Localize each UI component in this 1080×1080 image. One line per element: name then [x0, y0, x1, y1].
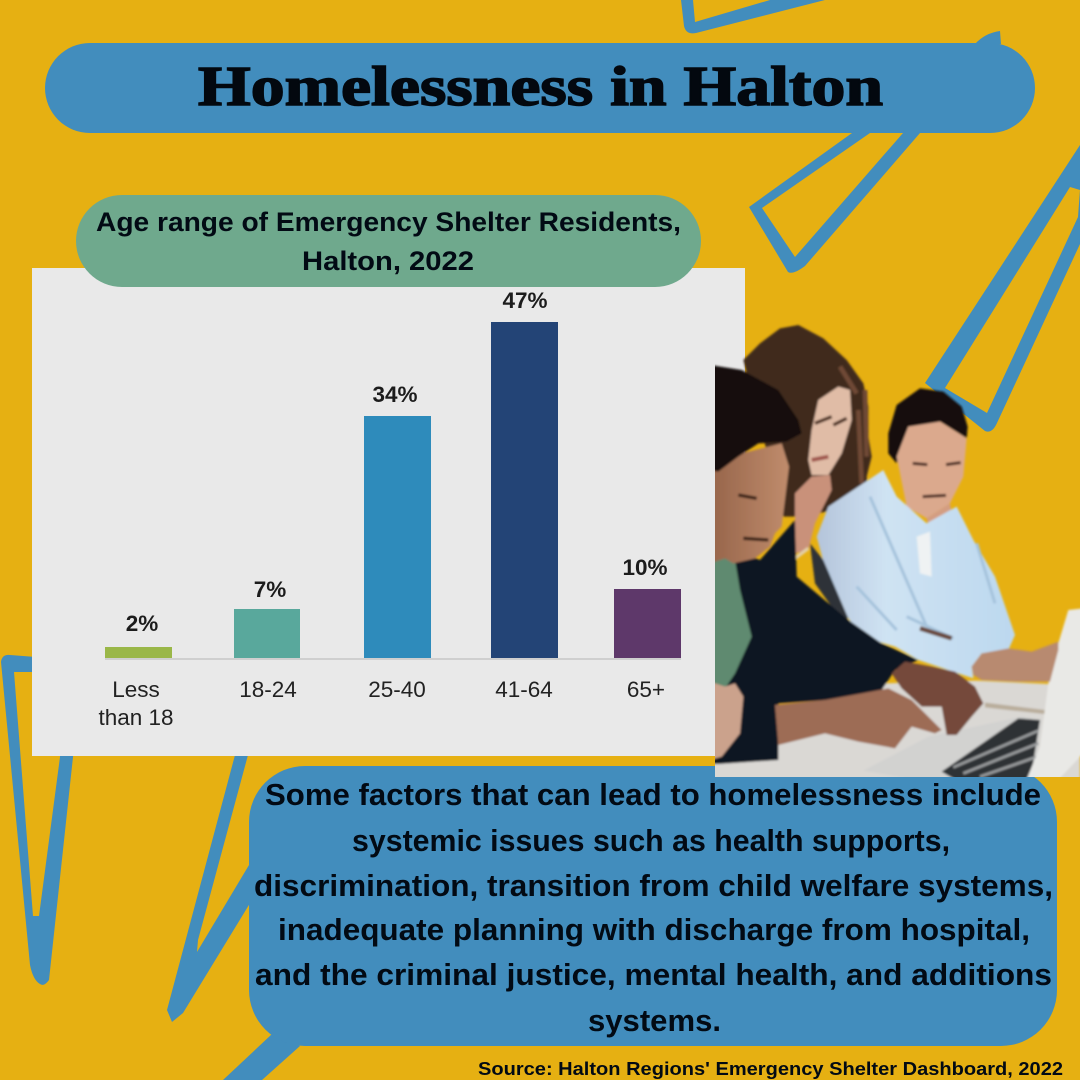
title pill — [45, 43, 1035, 133]
factors text block: systems. — [588, 1003, 721, 1038]
top triangle outline — [681, 0, 825, 33]
title: Homelessness in Halton — [198, 56, 883, 118]
bar: 65+: 65+ — [627, 677, 665, 702]
heading pill — [76, 195, 701, 287]
bar: 18-24: 18-24 — [239, 677, 297, 702]
bar: 41-64 — [491, 288, 558, 702]
bar: 65+: 10% — [622, 555, 668, 580]
bar: 18-24: 7% — [254, 577, 286, 602]
woman in the middle — [743, 325, 872, 558]
left triangle outline — [1, 655, 75, 985]
woman on the right — [810, 388, 1058, 682]
title banner — [45, 43, 1035, 133]
bar: 41-64: 47% — [502, 288, 548, 313]
upper right triangle outline — [749, 31, 1001, 273]
factors text block: and the criminal justice, mental health, and additions — [255, 957, 1052, 992]
book on table — [985, 703, 1045, 714]
chart background — [32, 268, 745, 756]
factors text block: systemic issues such as health supports, — [352, 823, 950, 858]
factors text block: Some factors that can lead to homelessness include — [265, 777, 1041, 812]
centre triangle outline — [167, 755, 255, 1022]
table — [710, 677, 1080, 783]
chart heading: Halton, 2022 — [302, 246, 474, 276]
bar: 25-40: 34% — [372, 382, 418, 407]
chart heading — [76, 195, 701, 287]
laptop — [940, 607, 1080, 777]
man in the foreground — [710, 365, 983, 764]
factors text block — [254, 777, 1053, 1038]
bar: 25-40 — [364, 382, 431, 702]
source note: Source: Halton Regions' Emergency Shelter Dashboard, 2022 — [478, 1058, 1063, 1079]
heading text: Age range of Emergency Shelter Residents, — [96, 207, 681, 237]
bar: Less than 18: than 18 — [98, 705, 174, 730]
right triangle outline — [925, 145, 1080, 432]
bar: 18-24 — [234, 577, 300, 702]
bar: 41-64: 41-64 — [495, 677, 553, 702]
bar: 25-40: 25-40 — [368, 677, 426, 702]
factors text block: discrimination, transition from child welfare systems, — [254, 868, 1053, 903]
bar: Less than 18 — [98, 611, 174, 730]
axis line — [105, 658, 681, 660]
photo: three students at a laptop — [710, 325, 1080, 783]
bar: Less than 18: Less — [112, 677, 160, 702]
text bubble — [249, 766, 1057, 1046]
panel: bar chart — [32, 268, 745, 756]
speech bubble tail — [223, 1034, 300, 1080]
bar: Less than 18: 2% — [126, 611, 158, 636]
bar: 65+ — [614, 555, 681, 702]
factors text block: inadequate planning with discharge from hospital, — [278, 912, 1030, 947]
